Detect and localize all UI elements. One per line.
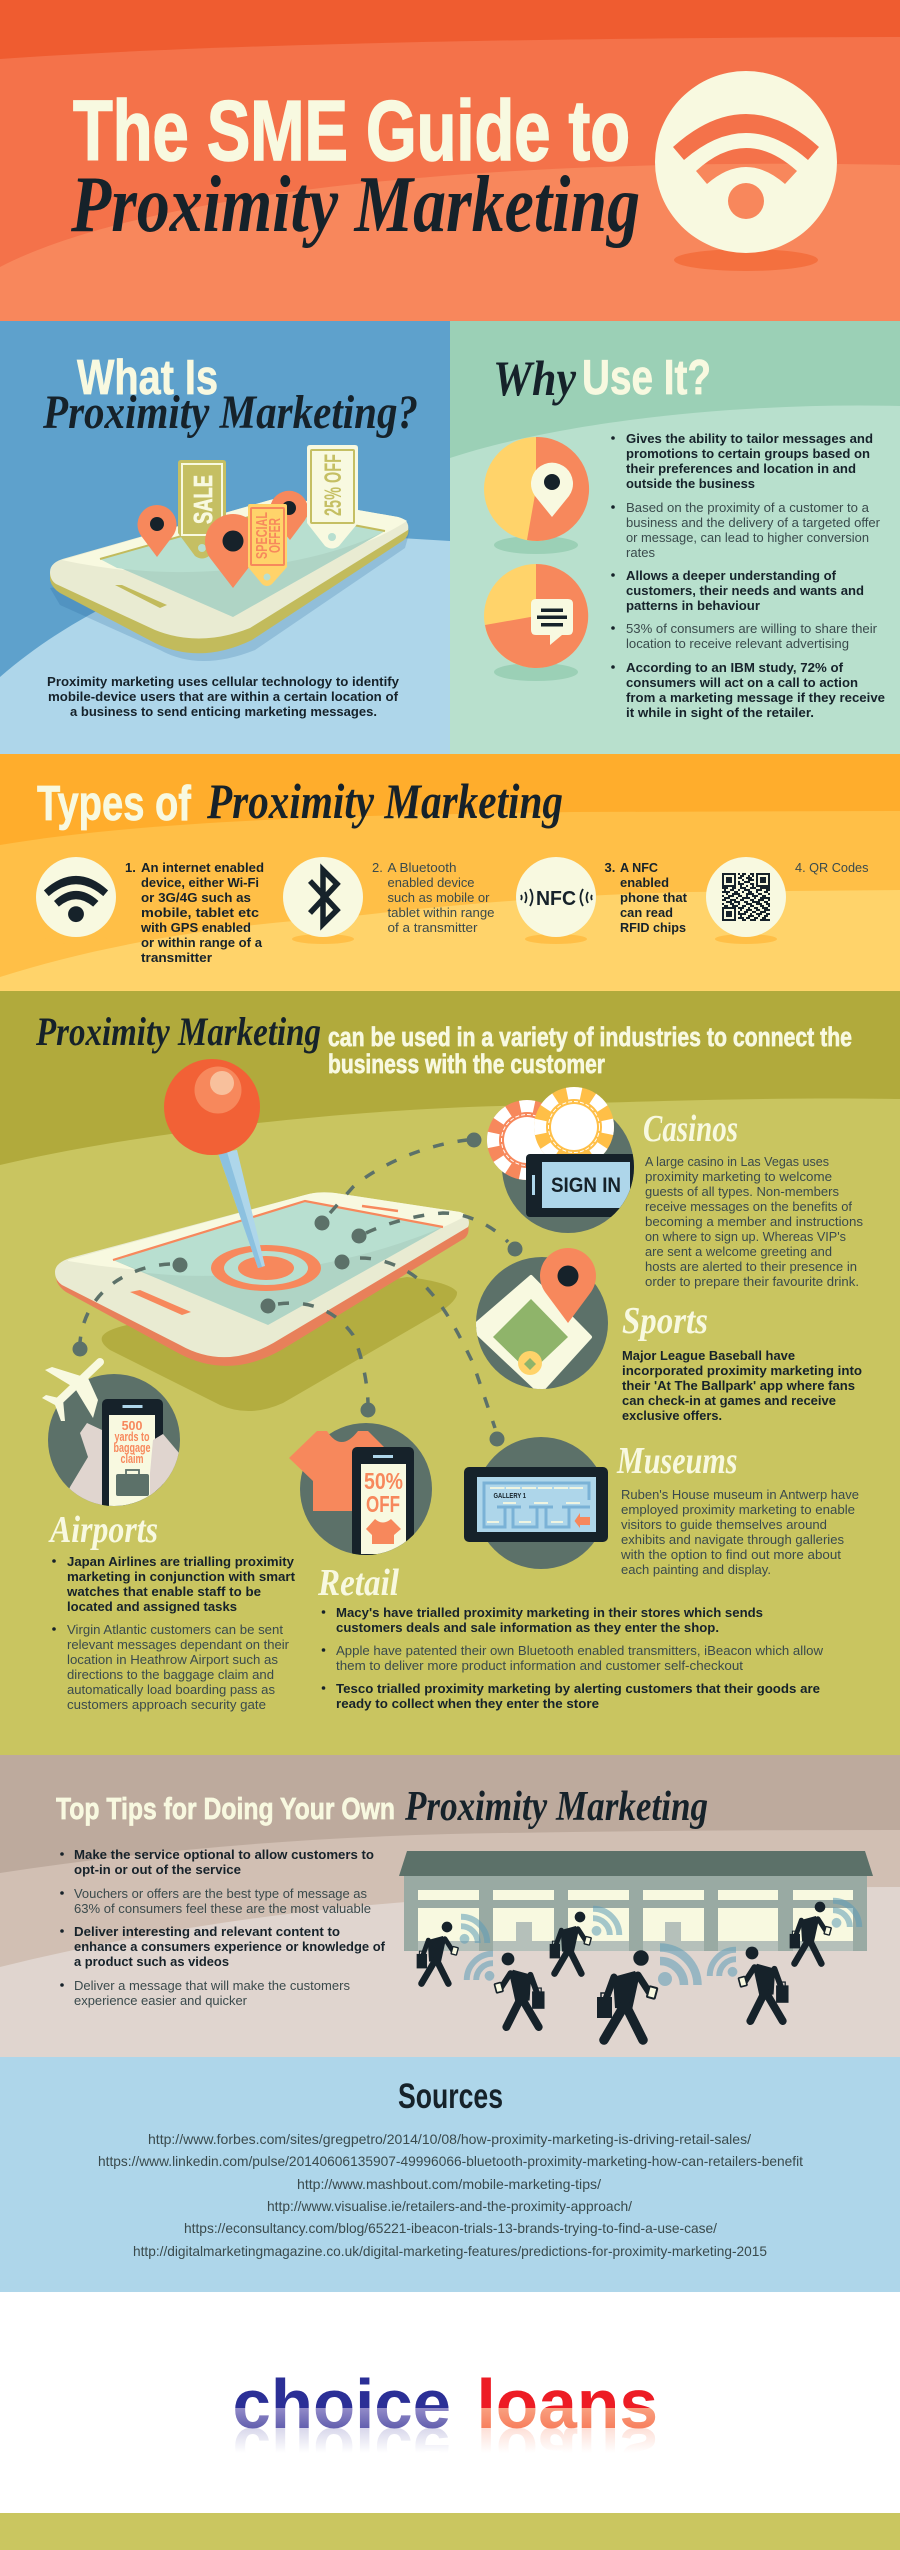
text: type 3: RFID chips bbox=[620, 920, 686, 935]
icon: qr code bbox=[706, 857, 786, 944]
heading: Museums: Museums bbox=[616, 1440, 738, 1482]
heading: sources: Sources bbox=[398, 2077, 503, 2116]
text: museums: exhibits and navigate through galleries bbox=[621, 1532, 844, 1547]
panel: types of proximity marketing bbox=[0, 754, 900, 991]
list: reasons: 53% of consumers are willing to share their bbox=[626, 621, 878, 636]
text: type 1: mobile, tablet etc bbox=[141, 905, 259, 920]
panel: what is proximity marketing bbox=[0, 321, 450, 754]
illustration: shoppers with phones bbox=[417, 1902, 831, 2040]
list: reasons: Gives the ability to tailor messages and bbox=[626, 431, 873, 446]
icon: pin left bbox=[138, 505, 176, 557]
text: museums: employed proximity marketing to enable bbox=[621, 1502, 855, 1517]
heading: Use It?: Use It? bbox=[582, 351, 711, 405]
dashed connectors bbox=[80, 1140, 508, 1428]
icon: ballpark with pin bbox=[472, 1248, 608, 1392]
list: tips: Make the service optional to allow customers to bbox=[74, 1847, 374, 1862]
list: retail: Tesco trialled proximity marketing by alerting customers that their goods are bbox=[336, 1681, 820, 1696]
heading: Proximity Marketing: Proximity Marketing bbox=[404, 1784, 708, 1830]
tag: special offer bbox=[248, 504, 287, 586]
text: casinos: are sent a welcome greeting and bbox=[645, 1244, 832, 1259]
logo: choice loans: choice bbox=[232, 2365, 451, 2443]
heading: Types of: Types of bbox=[37, 777, 192, 831]
icon: wifi bbox=[36, 857, 116, 944]
text: type 3: A NFC bbox=[620, 860, 659, 875]
list: reasons: promotions to certain groups based on bbox=[626, 446, 870, 461]
text: type 2: 2. bbox=[372, 860, 383, 875]
heading: Casinos: Casinos bbox=[643, 1108, 738, 1150]
text: type 2: enabled device bbox=[388, 875, 474, 890]
icon: bluetooth bbox=[283, 857, 363, 944]
list: source urls: http://digitalmarketingmagazine.co.uk/digital-marketing-features/predictions-for-proximity-marketing-2015 bbox=[133, 2243, 767, 2259]
text: casinos: guests of all types. Non-members bbox=[645, 1184, 839, 1199]
text: type 1 bbox=[125, 860, 264, 965]
list: tips: 63% of consumers feel these are the most valuable bbox=[74, 1901, 371, 1916]
list: tips: Deliver a message that will make the customers bbox=[74, 1978, 350, 1993]
panel: sources bbox=[0, 2057, 900, 2292]
text: type 1: 1. bbox=[125, 860, 136, 875]
list: tips: enhance a consumers experience or knowledge of bbox=[74, 1939, 386, 1954]
icon: wifi shadow bbox=[674, 249, 818, 271]
text: type 1: An internet enabled bbox=[141, 860, 264, 875]
text: museums: visitors to guide themselves around bbox=[621, 1517, 827, 1532]
panel: logo footer bbox=[0, 2292, 900, 2550]
title: Proximity Marketing: Proximity Marketing bbox=[70, 161, 640, 249]
list: source urls: https://www.linkedin.com/pulse/20140606135907-49996066-bluetooth-proximity-marketing-how-can-retailers-benefit bbox=[98, 2153, 803, 2169]
text: type 2: such as mobile or bbox=[388, 890, 490, 905]
text: museums: each painting and display. bbox=[621, 1562, 771, 1577]
icon: airport phone and plane: claim bbox=[120, 1452, 144, 1466]
heading: Sports: Sports bbox=[622, 1300, 708, 1342]
list: reasons: or message, can lead to higher conversion bbox=[626, 530, 869, 545]
list: reasons: location to receive relevant advertising bbox=[626, 636, 849, 651]
list: reasons: According to an IBM study, 72% of bbox=[626, 660, 844, 675]
list: airports: watches that enable staff to be bbox=[66, 1584, 261, 1599]
text: sports: incorporated proximity marketing into bbox=[622, 1363, 862, 1378]
icon: casino chips and tablet bbox=[487, 1087, 636, 1233]
text: type 3 bbox=[604, 860, 688, 935]
heading: industries subtitle: business with the customer bbox=[328, 1049, 605, 1079]
heading: Retail: Retail bbox=[317, 1562, 399, 1604]
text: museums: Ruben's House museum in Antwerp have bbox=[621, 1487, 859, 1502]
logo: choice loans: choice bbox=[232, 2413, 451, 2491]
panel: top tips bbox=[0, 1755, 900, 2057]
icon: museum tablet: GALLERY 1 bbox=[494, 1493, 526, 1500]
text: casinos: A large casino in Las Vegas uses bbox=[645, 1154, 829, 1169]
list: airports: relevant messages dependant on their bbox=[67, 1637, 290, 1652]
icon: airport phone and plane: yards to bbox=[114, 1430, 150, 1444]
list: airports: Virgin Atlantic customers can be sent bbox=[67, 1622, 283, 1637]
icon: casino chips and tablet: SIGN IN bbox=[551, 1174, 621, 1197]
heading: Proximity Marketing: Proximity Marketing bbox=[206, 773, 563, 829]
list: retail: customers deals and sale information as they enter the shop. bbox=[336, 1620, 719, 1635]
icon: retail shirt and phone: OFF bbox=[366, 1491, 400, 1517]
list: airports: customers approach security gate bbox=[67, 1697, 266, 1712]
tag: sale bbox=[178, 460, 226, 558]
list: airports: directions to the baggage claim and bbox=[67, 1667, 274, 1682]
list: source urls bbox=[98, 2131, 803, 2259]
tag: sale: SALE bbox=[188, 475, 218, 524]
tag: 25% off bbox=[307, 445, 358, 548]
list: reasons: outside the business bbox=[626, 476, 755, 491]
list: reasons: patterns in behaviour bbox=[626, 598, 760, 613]
icon: retail shirt and phone: 50% bbox=[364, 1468, 403, 1494]
chart: pie with speech bubble bbox=[484, 564, 588, 681]
connector dots bbox=[72, 1132, 522, 1446]
list: tips bbox=[60, 1847, 386, 2008]
text: sports: Major League Baseball have bbox=[622, 1348, 795, 1363]
list: source urls: http://www.visualise.ie/retailers-and-the-proximity-approach/ bbox=[267, 2198, 632, 2214]
text: definition: a business to send enticing marketing messages. bbox=[70, 704, 377, 719]
heading: Proximity Marketing script: Proximity Marketing bbox=[35, 1009, 321, 1054]
logo: choice loans bbox=[232, 2365, 658, 2491]
heading: Airports: Airports bbox=[48, 1509, 158, 1551]
icon: wifi badge bbox=[655, 71, 837, 253]
target rings bbox=[211, 1245, 321, 1291]
list: airports: Japan Airlines are trialling proximity bbox=[67, 1554, 295, 1569]
illustration: wifi signals bbox=[460, 1901, 859, 1986]
text: casinos: order to prepare their favourite drink. bbox=[645, 1274, 859, 1289]
heading: Why: Why bbox=[493, 350, 577, 406]
text: definition: Proximity marketing uses cellular technology to identify bbox=[47, 674, 400, 689]
text: type 3: can read bbox=[620, 905, 673, 920]
text: type 2: of a transmitter bbox=[388, 920, 478, 935]
icon: retail shirt and phone bbox=[289, 1423, 432, 1557]
text: casinos: hosts are alerted to their presence in bbox=[645, 1259, 857, 1274]
list: retail: Apple have patented their own Bluetooth enabled transmitters, iBeacon which allow bbox=[336, 1643, 824, 1658]
list: reasons: customers, their needs and wants and bbox=[626, 583, 864, 598]
text: casinos: proximity marketing to welcome bbox=[645, 1169, 832, 1184]
text: sports: their 'At The Ballpark' app where fans bbox=[622, 1378, 855, 1393]
panel: industries bbox=[0, 991, 900, 1755]
illustration: phone with pins and tags bbox=[50, 445, 410, 661]
list: airports bbox=[52, 1554, 296, 1712]
heading: Top Tips for Doing Your Own: Top Tips for Doing Your Own bbox=[56, 1791, 395, 1826]
icon: plane bbox=[42, 1362, 100, 1421]
text: museums: with the option to find out more about bbox=[620, 1547, 841, 1562]
list: reasons: rates bbox=[626, 545, 655, 560]
pin needle bbox=[218, 1150, 265, 1268]
list: airports: located and assigned tasks bbox=[67, 1599, 237, 1614]
list: reasons: business and the delivery of a targeted offer bbox=[626, 515, 881, 530]
illustration: shopfront bbox=[399, 1851, 873, 1951]
text: type 2: A Bluetooth bbox=[388, 860, 456, 875]
list: reasons: from a marketing message if they receive bbox=[626, 690, 885, 705]
icon: pin rear bbox=[270, 491, 308, 540]
illustration: central phone with map pin bbox=[55, 1059, 469, 1411]
text: definition bbox=[47, 674, 400, 719]
text: sports: can check-in at games and receive bbox=[622, 1393, 836, 1408]
list: reasons: consumers will act on a call to action bbox=[626, 675, 858, 690]
text: definition: mobile-device users that are within a certain location of bbox=[48, 689, 399, 704]
text: type 3: phone that bbox=[620, 890, 688, 905]
icon: pin large bbox=[205, 514, 261, 588]
list: source urls: http://www.mashbout.com/mobile-marketing-tips/ bbox=[297, 2176, 601, 2192]
list: airports: marketing in conjunction with smart bbox=[67, 1569, 296, 1584]
text: type 1: or within range of a bbox=[141, 935, 263, 950]
list: airports: automatically load boarding pass as bbox=[67, 1682, 275, 1697]
text: type 3: enabled bbox=[620, 875, 669, 890]
list: tips: Deliver interesting and relevant content to bbox=[74, 1924, 340, 1939]
list: retail: them to deliver more product information and customer self-checkout bbox=[336, 1658, 743, 1673]
heading: What Is: What Is bbox=[77, 351, 218, 405]
list: retail: ready to collect when they enter the store bbox=[336, 1696, 599, 1711]
text: casinos bbox=[645, 1154, 863, 1289]
pin ball bbox=[164, 1059, 260, 1155]
tag: special offer: OFFER bbox=[267, 518, 284, 553]
icon: airport phone and plane: baggage bbox=[114, 1441, 151, 1455]
list: source urls: https://econsultancy.com/blog/65221-ibeacon-trials-13-brands-trying-to-find-a-use-case/ bbox=[184, 2220, 717, 2236]
panel: why use it bbox=[450, 321, 900, 754]
heading: industries subtitle bbox=[328, 1022, 852, 1079]
icon: museum tablet bbox=[464, 1437, 608, 1569]
list: source urls: http://www.forbes.com/sites/gregpetro/2014/10/08/how-proximity-marketing-is-driving-retail-sales/ bbox=[148, 2131, 751, 2147]
text: type 1: transmitter bbox=[141, 950, 212, 965]
text: type 1: device, either Wi-Fi bbox=[141, 875, 259, 890]
tag: 25% off: 25% OFF bbox=[320, 454, 347, 516]
text: museums bbox=[620, 1487, 859, 1577]
text: casinos: on where to sign up. Whereas VIP's bbox=[645, 1229, 846, 1244]
list: reasons: their preferences and location in and bbox=[626, 461, 856, 476]
list: reasons: Allows a deeper understanding of bbox=[626, 568, 837, 583]
text: type 2: tablet within range bbox=[388, 905, 494, 920]
icon: nfc: NFC bbox=[536, 888, 576, 910]
list: airports: location in Heathrow Airport such as bbox=[67, 1652, 279, 1667]
text: type 2 bbox=[372, 860, 494, 935]
list: tips: experience easier and quicker bbox=[74, 1993, 248, 2008]
icon: nfc bbox=[516, 857, 596, 944]
logo: choice loans: loans bbox=[476, 2365, 658, 2443]
list: reasons bbox=[611, 431, 885, 720]
logo: choice loans: loans bbox=[476, 2413, 658, 2491]
chart: pie with location pin bbox=[484, 437, 589, 554]
tag: special offer: SPECIAL bbox=[254, 512, 271, 559]
list: reasons: it while in sight of the retailer. bbox=[626, 705, 814, 720]
heading: Proximity Marketing?: Proximity Marketing? bbox=[42, 386, 418, 439]
text: sports: exclusive offers. bbox=[622, 1408, 722, 1423]
text: sports bbox=[622, 1348, 862, 1423]
text: type 3: 3. bbox=[604, 860, 615, 875]
text: type 1: or 3G/4G such as bbox=[141, 890, 251, 905]
title: The SME Guide to: The SME Guide to bbox=[73, 84, 630, 179]
list: reasons: Based on the proximity of a customer to a bbox=[626, 500, 870, 515]
list: tips: a product such as videos bbox=[74, 1954, 229, 1969]
list: retail: Macy's have trialled proximity marketing in their stores which sends bbox=[336, 1605, 763, 1620]
text: casinos: receive messages on the benefits of bbox=[645, 1199, 852, 1214]
list: tips: Vouchers or offers are the best type of message as bbox=[74, 1886, 367, 1901]
icon: airport phone and plane: 500 bbox=[122, 1419, 142, 1433]
panel: header bbox=[0, 0, 900, 321]
text: casinos: becoming a member and instructions bbox=[645, 1214, 863, 1229]
icon: airport phone and plane bbox=[42, 1362, 185, 1510]
list: tips: opt-in or out of the service bbox=[74, 1862, 241, 1877]
text: type 4: 4. QR Codes bbox=[795, 860, 869, 875]
list: retail bbox=[322, 1605, 824, 1711]
text: type 1: with GPS enabled bbox=[140, 920, 251, 935]
